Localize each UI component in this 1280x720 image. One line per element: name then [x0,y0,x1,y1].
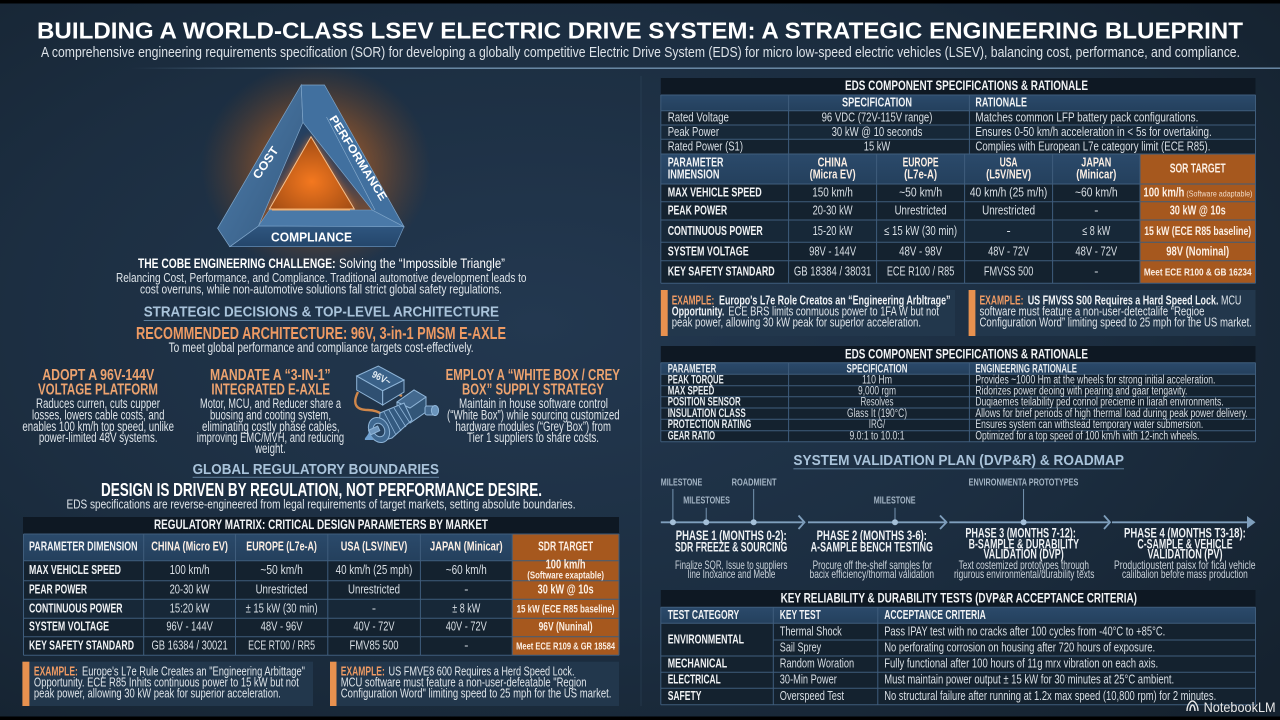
row: continuous power: CONTINUOUS POWER [668,224,763,238]
row: max vehicle speed: MAX VEHICLE SPEED [668,186,762,200]
regulation statement: DESIGN IS DRIVEN BY REGULATION, NOT PERFORMANCE DESIRE. [101,479,542,500]
phase 2: A-SAMPLE BENCH TESTING [811,539,933,555]
strategy: voltage platform: losses, lowers cable costs, and [32,408,164,423]
row: continuous power: ≤ 8 kW [1082,224,1110,238]
row: continuous power: ≤ 15 kW (30 min) [884,224,957,238]
row: position sensor [668,397,1224,409]
row: peak power: PEAK POWER [668,203,727,217]
row: key safety standard: GB 18384 / 38031 [794,265,871,279]
row: system voltage [29,620,593,634]
table: component specifications: EDS COMPONENT SPECIFICATIONS & RATIONALE [845,345,1088,361]
milestone labels: ENVIRONMENTA PROTOTYPES [969,477,1078,489]
header row [668,608,986,622]
matrix header: SOR TARGET [1170,162,1226,176]
row: key safety standard: GB 16384 / 30021 [151,638,228,652]
icon: impossible triangle [201,63,431,273]
row: peak power [668,203,1226,217]
strategy: integrated e-axle: eliminating costly phase cables, [202,419,340,434]
phase 2 [810,527,934,581]
row: peak power [29,583,594,597]
milestone labels: MILESTONE [874,494,916,506]
phase 1: SDR FREEZE & SOURCING [675,539,787,555]
strategy: supply strategy: EMPLOY A “WHITE BOX / CREY [446,367,620,384]
header row: JAPAN (Minicar) [430,540,503,554]
row: key safety standard [29,638,615,652]
matrix header: (L7e-A) [904,167,937,181]
matrix header: EUROPE [903,156,939,170]
strategy: integrated e-axle: INTEGRATED E-AXLE [211,382,330,399]
table: EDS specifications and market matrix: EDS COMPONENT SPECIFICATIONS & RATIONALE [845,77,1088,93]
row: max speed: MAX SPEED [668,386,714,398]
strategy: voltage platform: VOLTAGE PLATFORM [38,382,158,399]
matrix header: (Minicar) [1076,167,1116,181]
strategy: voltage platform: power-limited 48V systems. [39,430,158,445]
recommended architecture: RECOMMENDED ARCHITECTURE: 96V, 3-in-1 PMSM E-AXLE [136,323,506,343]
recommended architecture: To meet global performance and compliance targets cost-effectively. [169,340,474,355]
row: mechanical: Random Woration [780,657,854,671]
table: reliability and durability tests: KEY RELIABILITY & DURABILITY TESTS (DVP&R ACCEPTANCE CRITERIA) [781,590,1137,606]
phase 2: Procure off the-shelf samples for [813,558,932,572]
header row: EUROPE (L7e-A) [246,540,317,554]
table: component specifications [661,345,1256,442]
header row: ACCEPTANCE CRITERIA [884,608,986,622]
heading: strategic decisions: STRATEGIC DECISIONS & TOP-LEVEL ARCHITECTURE [144,304,499,320]
row: position sensor: Resolves [860,397,894,409]
strategy: integrated e-axle: MANDATE A “3-IN-1” [210,367,331,384]
matrix header: CHINA [818,156,848,170]
row: protection rating: IRG/ [869,419,886,431]
row: system voltage: 98V (Nominal) [1166,244,1229,258]
callout: Europe arbitrage example: Opportunity. [672,304,724,318]
rows: environmental: Thermal Shock [780,624,842,638]
header row: KEY TEST [780,608,821,622]
rows: environmental: No perforating corrosion on housing after 720 hours of exposure. [884,641,1155,655]
phase 4: VALIDATION (PV) [1147,546,1223,562]
row: key safety standard: KEY SAFETY STANDARD [668,265,775,279]
matrix header [668,156,1226,181]
specification rows: Ensures 0-50 km/h acceleration in < 5s for overtaking. [975,125,1212,139]
regulation statement: EDS specifications are reverse-engineered from legal requirements of target markets, setting absolute boundaries. [66,496,576,512]
specification rows: 30 kW @ 10 seconds [832,125,922,139]
phase 3: B-SAMPLE & DURABILITY [969,535,1079,551]
header row [29,540,593,554]
icon: e-axle with battery: 96V~ [370,369,393,388]
row: peak power: - [464,583,468,597]
rows: environmental: Pass IPAY test with no cracks after 100 cycles from -40°C to +85°C. [884,624,1165,638]
phase 4 [1114,524,1256,581]
row: insulation class: INSULATION CLASS [668,408,746,420]
text block: core engineering challenge [116,255,526,296]
header row: CHINA (Micro EV) [151,540,228,554]
row: safety [668,689,1216,703]
row: protection rating [668,419,1203,431]
row: peak torque: PEAK TORQUE [668,374,724,386]
row: electrical: 30-Min Power [780,673,837,687]
row: key safety standard: ECE R100 / R85 [887,265,954,279]
strategy: supply strategy: Maintain in house software control [459,396,608,411]
row: key safety standard: FMV85 500 [350,638,399,652]
row: system voltage: SYSTEM VOLTAGE [668,244,749,258]
header row: ENGINEERING RATIONALE [975,363,1077,375]
row: max speed: 9,000 rgm [858,386,896,398]
text block: core engineering challenge: Solving the “Impossible Triangle” [339,255,505,271]
row: peak power: 30 kW @ 10s [538,583,594,597]
row: safety: SAFETY [668,689,702,703]
row: system voltage: 48V - 72V [988,244,1030,258]
row: max vehicle speed: 100 km/h [170,563,210,577]
specification rows: Rated Power (S1) [668,140,743,154]
specification rows [668,96,1212,154]
row: max vehicle speed: ~60 km/h [1075,186,1118,200]
callout: US example: Configuration Word" limiting speed to 25 mph for the US market. [341,686,611,701]
strategy: supply strategy: (“White Box”) while sourcing customized [447,408,620,423]
row: key safety standard: Meet ECE R109 & GR 18584 [516,641,615,652]
row: continuous power: 15-20 kW [813,224,853,238]
row: continuous power [29,601,615,615]
title: BUILDING A WORLD-CLASS LSEV ELECTRIC DRIVE SYSTEM: A STRATEGIC ENGINEERING BLUEPRINT [37,18,1243,44]
table: EDS specifications and market matrix [661,77,1256,283]
table: reliability and durability tests [661,590,1256,705]
row: max speed: Ridorizes power deoing with pearing and gaar tengavity. [975,386,1187,398]
strategy: voltage platform: Raduces curren, cuts cupper [36,396,160,411]
row: continuous power: - [372,601,376,615]
matrix header: (Micra EV) [810,167,856,181]
row: peak power: Unrestricted [982,203,1035,217]
rows: environmental [668,624,1165,655]
phase 2: bacix efficiency/thormal validation [810,567,934,581]
row: system voltage [668,244,1229,258]
phase 1: Finalize SQR, Issue to suppliers [675,558,787,572]
callout: US speed lock example: EXAMPLE: [980,292,1024,307]
row: system voltage: 96V (Nuninal) [539,622,593,634]
header row: PARAMETER [668,363,717,375]
specification rows: SPECIFICATION [842,96,912,110]
phase 3: rigurous environmental/durability texts [954,567,1094,581]
callout: US example: EXAMPLE: [341,664,385,679]
callout: US speed lock example [969,290,1256,336]
row: max vehicle speed: 40 km/h (25 m/h) [970,186,1047,200]
row: mechanical: Fully functional after 100 hours of 11g mrx vibration on each axis. [884,657,1158,671]
row: continuous power: ± 8 kW [452,601,480,615]
phase 3: PHASE 3 (MONTHS 7-12): [965,524,1076,540]
row: max vehicle speed: MAX VEHICLE SPEED [29,563,121,577]
callout: Europe example [22,662,313,706]
label: compliance: COMPLIANCE [271,230,352,244]
row: continuous power: 15 kW (ECE R85 baseline) [517,603,615,615]
header row: TEST CATEGORY [668,608,740,622]
specification rows: Rated Voltage [668,111,729,125]
table: regulatory matrix [23,516,619,655]
strategy: integrated e-axle: buosing and cooting system, [210,408,331,423]
row: max vehicle speed: ~50 km/h [899,186,942,200]
strategy: supply strategy: Tier 1 suppliers to share costs. [467,430,599,445]
row: max vehicle speed: 100 km/h [546,557,586,571]
header row: PARAMETER DIMENSION [29,540,138,554]
strategy: supply strategy: hardware modules (“Grey Box”) from [455,419,611,434]
matrix header: JAPAN [1081,156,1111,170]
row: key safety standard: - [464,638,468,652]
phase 1 [675,527,787,581]
text block: core engineering challenge: cost overruns, while non-automotive solutions fall strict global safety regulations. [140,282,502,296]
text block: core engineering challenge: Relancing Cost, Performance, and Compliance. Traditional automotive development leads to [116,270,526,285]
row: max speed [668,386,1187,398]
strategy: supply strategy: BOX” SUPPLY STRATEGY [462,382,604,399]
header row [668,363,1077,375]
row: max vehicle speed [668,186,1253,200]
row: key safety standard: Meet ECE R100 & GB 16234 [1144,267,1252,279]
text block: core engineering challenge: THE COBE ENGINEERING CHALLENGE: [138,255,336,271]
callout: Europe arbitrage example: peak power, allowing 30 kW peak for superlor acceleration. [672,315,921,330]
strategy: integrated e-axle: Motor, MCU, and Reducer share a [200,396,341,411]
row: electrical [668,673,1174,687]
matrix header: (L5V/NEV) [986,167,1031,181]
row: peak power: 20-30 kW [813,203,853,217]
row: system voltage: 48V - 96V [261,620,303,634]
strategy: integrated e-axle: weight. [254,441,286,456]
header row: SDR TARGET [538,540,593,554]
row: system voltage: 40V - 72V [446,620,487,634]
phase 3 [954,524,1094,581]
callout: Europe arbitrage example [661,290,955,336]
label: cost: COST [250,143,282,182]
row: continuous power: - [1007,224,1011,238]
specification rows: Peak Power [668,125,719,139]
row: system voltage: SYSTEM VOLTAGE [29,620,109,634]
row: continuous power [668,224,1251,238]
heading: system validation plan: SYSTEM VALIDATION PLAN (DVP&R) & ROADMAP [793,453,1124,469]
row: peak power: Unrestricted [895,203,947,217]
row: peak power: Unrestricted [256,583,308,597]
row: key safety standard: - [1094,265,1098,279]
label: performance: PERFORMANCE [326,114,389,203]
row: peak power: - [1094,203,1098,217]
strategy: integrated e-axle: improving EMC/MVH, and reducing [197,430,344,445]
callout: Europe example: Europe's L7e Rule Creates an "Engineering Arbittage" [82,664,305,679]
matrix header: USA [1000,156,1018,170]
callout: Europe arbitrage example: Europo's L7e Role Creatos an “Engineering Arbltrage” [719,292,950,307]
row: gear ratio: Optimized for a top speed of 100 km/h with 12-inch wheels. [975,430,1199,442]
row: peak torque: 110 Hm [862,374,892,386]
callout: US speed lock example: software must feature a non-user-detectalife “Regioe [980,304,1204,318]
row: gear ratio [668,430,1199,442]
phase 3: VALIDATION (DVP) [983,546,1064,562]
milestone labels: ROADMIENT [732,477,777,489]
regulation statement [66,479,576,512]
callout: US example: MCU software must feature a non-user-defeatable "Region [341,675,586,690]
row: key safety standard: KEY SAFETY STANDARD [29,638,134,652]
strategy: voltage platform: ADOPT A 96V-144V [42,367,154,384]
row: continuous power: 15:20 kW [170,601,210,615]
row: mechanical: MECHANICAL [668,657,727,671]
rows: environmental: Sail Sprey [780,641,822,655]
row: max vehicle speed: 40 km/h (25 mph) [336,563,412,577]
specification rows: 15 kW [864,140,890,154]
phase 1: PHASE 1 (MONTHS 0-2): [676,527,787,543]
strategy: integrated e-axle [197,367,344,456]
row: peak power: PEAR POWER [29,583,87,597]
timeline [661,477,1256,529]
callout: Europe example: EXAMPLE: [34,664,78,679]
title [37,18,1243,61]
row: peak power: 30 kW @ 10s [1170,203,1226,217]
row: max vehicle speed: 100 km/h [1143,186,1184,200]
row: system voltage: 96V - 144V [166,620,213,634]
strategy: voltage platform: enables 100 km/h top speed, unlike [22,419,174,434]
phase 3: Text costemized prototypes through [959,558,1089,572]
rows: environmental: ENVIRONMENTAL [668,632,744,646]
row: continuous power: CONTINUOUS POWER [29,601,122,615]
row: key safety standard: FMVSS 500 [984,265,1033,279]
phase 2: PHASE 2 (MONTHS 3-6): [817,527,927,543]
matrix header: PARAMETER [668,156,724,170]
milestone labels: MILESTONE [661,477,702,489]
specification rows: Complies with European L7e category limit (ECE R85). [975,140,1210,154]
row: max vehicle speed: 150 km/h [812,186,853,200]
row: protection rating: Ensures system can withstead temporary water submersion. [975,419,1203,431]
row: max vehicle speed: (Software adaptable) [1186,190,1253,199]
milestone labels [661,477,1078,506]
row: peak power: 20-30 kW [170,583,210,597]
callout: Europe arbitrage example: EXAMPLE: [672,292,714,307]
row: peak power: Unrestricted [348,583,400,597]
milestone labels: MILESTONES [683,494,730,506]
phase 1: line Inoxance and Meble [688,567,776,581]
row: system voltage: 98V - 144V [809,244,857,258]
row: position sensor: POSITION SENSOR [668,397,741,409]
table: regulatory matrix: REGULATORY MATRIX: CRITICAL DESIGN PARAMETERS BY MARKET [154,516,488,532]
callout: Europe example: Opportunity. ECE R85 Inhits continuous power to 15 kW but not [34,675,299,690]
callout: US example: US FMVE8 600 Requires a Herd Speed Lock. [388,664,574,679]
row: insulation class: Glass It (190°C) [847,408,907,420]
row: system voltage: 48V - 98V [899,244,943,258]
row: mechanical [668,657,1158,671]
callout: Europe example: peak power, allowing 30 kW peak for superior acceleration. [34,686,281,701]
row: insulation class [668,408,1248,420]
heading: global regulatory boundaries: GLOBAL REGULATORY BOUNDARIES [193,462,439,478]
row: continuous power: ± 15 kW (30 min) [246,601,318,615]
row: max vehicle speed: (Software exaptable) [527,570,604,581]
row: key safety standard: ECE RT00 / RR5 [248,638,315,652]
row: system voltage: 48V - 72V [1075,244,1118,258]
callout: US speed lock example: MCU [1221,292,1241,307]
row: safety: Overspeed Test [780,689,844,703]
row: system voltage: 40V - 72V [354,620,395,634]
row: max vehicle speed [29,557,604,581]
row: gear ratio: GEAR RATIO [668,430,715,442]
row: protection rating: PROTECTION RATING [668,419,751,431]
strategy: supply strategy [446,367,620,445]
callout: US example [330,662,619,706]
strategy: voltage platform [22,367,174,445]
header row: USA (LSV/NEV) [341,540,407,554]
row: max vehicle speed: ~60 km/h [446,563,487,577]
matrix header: INMENSION [668,167,720,181]
callout: Europe arbitrage example: ECE BRS limits conmuous power to 1FA W but not [728,304,939,318]
specification rows: Matches common LFP battery pack configurations. [975,111,1198,125]
specification rows: 96 VDC (72V-115V range) [822,111,932,125]
header row: SPECIFICATION [846,363,908,375]
row: electrical: ELECTRICAL [668,673,721,687]
icon: e-axle with battery [355,366,439,446]
row: electrical: Must maintain power output ± 15 kW for 30 minutes at 25°C ambient. [884,673,1174,687]
row: peak torque [668,374,1215,386]
row: key safety standard [668,265,1252,279]
recommended architecture [136,323,506,355]
row: max vehicle speed: ~50 km/h [260,563,303,577]
specification rows: RATIONALE [975,96,1027,110]
row: gear ratio: 9.0:1 to 10.0:1 [850,430,904,442]
